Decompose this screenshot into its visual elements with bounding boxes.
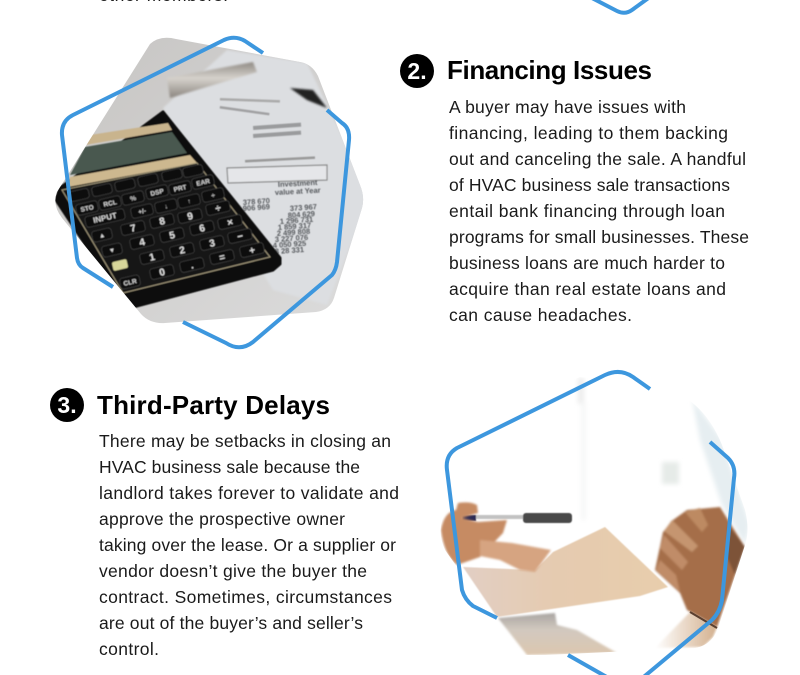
text block: financing issues: acquire than real estate loans and xyxy=(449,279,726,299)
number badge 2: 2. xyxy=(407,58,427,84)
calculator keys: labelled rows: . xyxy=(190,260,195,272)
printed figures on paper: 1 296 731 xyxy=(280,215,313,226)
text block: third-party delays: contract. Sometimes, circumstances xyxy=(99,587,392,607)
calculator keys: labelled rows: +/- xyxy=(138,208,147,216)
calculator keys: labelled rows: % xyxy=(130,195,137,203)
calculator keys: labelled rows: 1 xyxy=(148,252,157,264)
calculator keys: labelled rows: + xyxy=(248,245,256,257)
display screen xyxy=(70,132,187,175)
printed figures on paper: 4 050 925 xyxy=(273,239,306,250)
printed figures on paper: 8 28 331 xyxy=(275,245,304,256)
printed figures on paper: 1 859 317 xyxy=(278,221,311,232)
heading: Third-Party Delays: Third-Party Delays xyxy=(97,390,330,420)
printed figures on paper: 378 670 xyxy=(243,196,270,207)
calculator keys: labelled rows: 3 xyxy=(208,238,217,250)
text block: financing issues: business loans are much harder to xyxy=(449,253,725,273)
text block: third-party delays: control. xyxy=(99,639,159,659)
text block: financing issues: A buyer may have issues with xyxy=(449,97,686,117)
calculator keys: labelled rows: ▲ xyxy=(98,232,106,240)
calculator keys: labelled rows: 8 xyxy=(158,216,167,228)
text block: financing issues xyxy=(449,97,749,325)
calculator keys: labelled rows: 5 xyxy=(168,230,177,242)
text block: financing issues: entail bank financing through loan xyxy=(449,201,725,221)
photo: calculator on financial papers xyxy=(50,30,370,347)
text block: financing issues: can cause headaches. xyxy=(449,305,632,325)
text block: third-party delays xyxy=(99,431,399,659)
left hand holding pen xyxy=(441,502,551,572)
text block: third-party delays: landlord takes forever to validate and xyxy=(99,483,399,503)
calculator keys: labelled rows: = xyxy=(218,252,226,264)
text block: financing issues: of HVAC business sale transactions xyxy=(449,175,730,195)
number badge 3: 3. xyxy=(57,392,77,418)
calculator keys: labelled rows: PRT xyxy=(173,184,187,194)
calculator keys: labelled rows: 6 xyxy=(198,223,207,235)
watch strap xyxy=(690,612,717,628)
calculator keys: labelled rows: − xyxy=(236,231,244,243)
text block: third-party delays: taking over the lease. Or a supplier or xyxy=(99,535,396,555)
text block: third-party delays: HVAC business sale because the xyxy=(99,457,360,477)
calculator keys: labelled rows: RCL xyxy=(103,199,118,209)
photo background xyxy=(50,30,370,330)
calculator keys: labelled rows: ÷ xyxy=(211,192,216,200)
number badge 3 xyxy=(50,388,84,422)
pen cap xyxy=(167,62,327,108)
number badge 2 xyxy=(400,54,434,88)
calculator body xyxy=(56,112,280,307)
text block: financing issues: out and canceling the sale. A handful xyxy=(449,149,746,169)
calculator keys: labelled rows: 2 xyxy=(178,245,187,257)
calculator keys: arrow row xyxy=(68,164,204,202)
text block: third-party delays: approve the prospective owner xyxy=(99,509,345,529)
printed figures on paper: Investment xyxy=(278,178,318,189)
text block: third-party delays: vendor doesn’t give the buyer the xyxy=(99,561,367,581)
calculator keys: labelled rows: × xyxy=(226,217,234,229)
blue hexagon outline: calculator photo xyxy=(62,38,349,347)
calculator xyxy=(56,112,280,307)
blue hexagon outline: contract photo xyxy=(447,372,734,675)
calculator keys: labelled rows: STO xyxy=(80,204,94,214)
calculator keys: labelled rows: 9 xyxy=(186,211,195,223)
yellow key xyxy=(112,259,128,271)
printed figures on paper: value at Year xyxy=(275,186,321,197)
photo: handing over contract and pen xyxy=(430,365,760,675)
printed figures on paper: 3 227 076 xyxy=(275,233,308,244)
text block: third-party delays: There may be setbacks in closing an xyxy=(99,431,391,451)
decorative hexagon outline: previous section xyxy=(590,0,654,13)
calculator keys: labelled rows: INPUT xyxy=(92,211,118,225)
heading: Financing Issues: Financing Issues xyxy=(447,55,652,85)
text block: financing issues: programs for small businesses. These xyxy=(449,227,749,247)
calculator keys: labelled rows: ▼ xyxy=(108,247,116,255)
text block: financing issues: financing, leading to them backing xyxy=(449,123,728,143)
paper sheet xyxy=(163,50,370,305)
printed figures on paper: 906 969 xyxy=(243,202,270,213)
window shading xyxy=(578,378,750,545)
calculator keys: labelled rows: EAR xyxy=(196,178,211,188)
table shadow and reflection xyxy=(498,612,717,655)
calculator keys: labelled rows: 0 xyxy=(158,267,167,279)
photo background xyxy=(430,365,760,665)
pen xyxy=(462,513,572,523)
folder being passed xyxy=(463,527,668,617)
calculator keys: labelled rows xyxy=(75,174,265,290)
text block: third-party delays: are out of the buyer’s and seller’s xyxy=(99,613,363,633)
clasped hands xyxy=(655,507,745,627)
calculator keys: labelled rows: 7 xyxy=(129,223,138,235)
printed figures on paper: 804 629 xyxy=(288,209,315,220)
calculator keys: labelled rows: DSP xyxy=(150,188,165,198)
printed figures on paper: 373 967 xyxy=(290,202,317,213)
calculator keys: labelled rows: ↓ xyxy=(164,203,169,211)
printed figures on paper: 2 499 808 xyxy=(277,227,310,238)
calculator keys: labelled rows: CLR xyxy=(123,278,138,288)
calculator keys: labelled rows: ÷ xyxy=(214,203,223,215)
printed figures on paper xyxy=(220,98,327,256)
calculator keys: labelled rows: ↑ xyxy=(187,198,192,206)
calculator keys: labelled rows: 4 xyxy=(138,237,147,249)
calculator keypad xyxy=(62,163,270,293)
gold strips xyxy=(85,123,172,145)
